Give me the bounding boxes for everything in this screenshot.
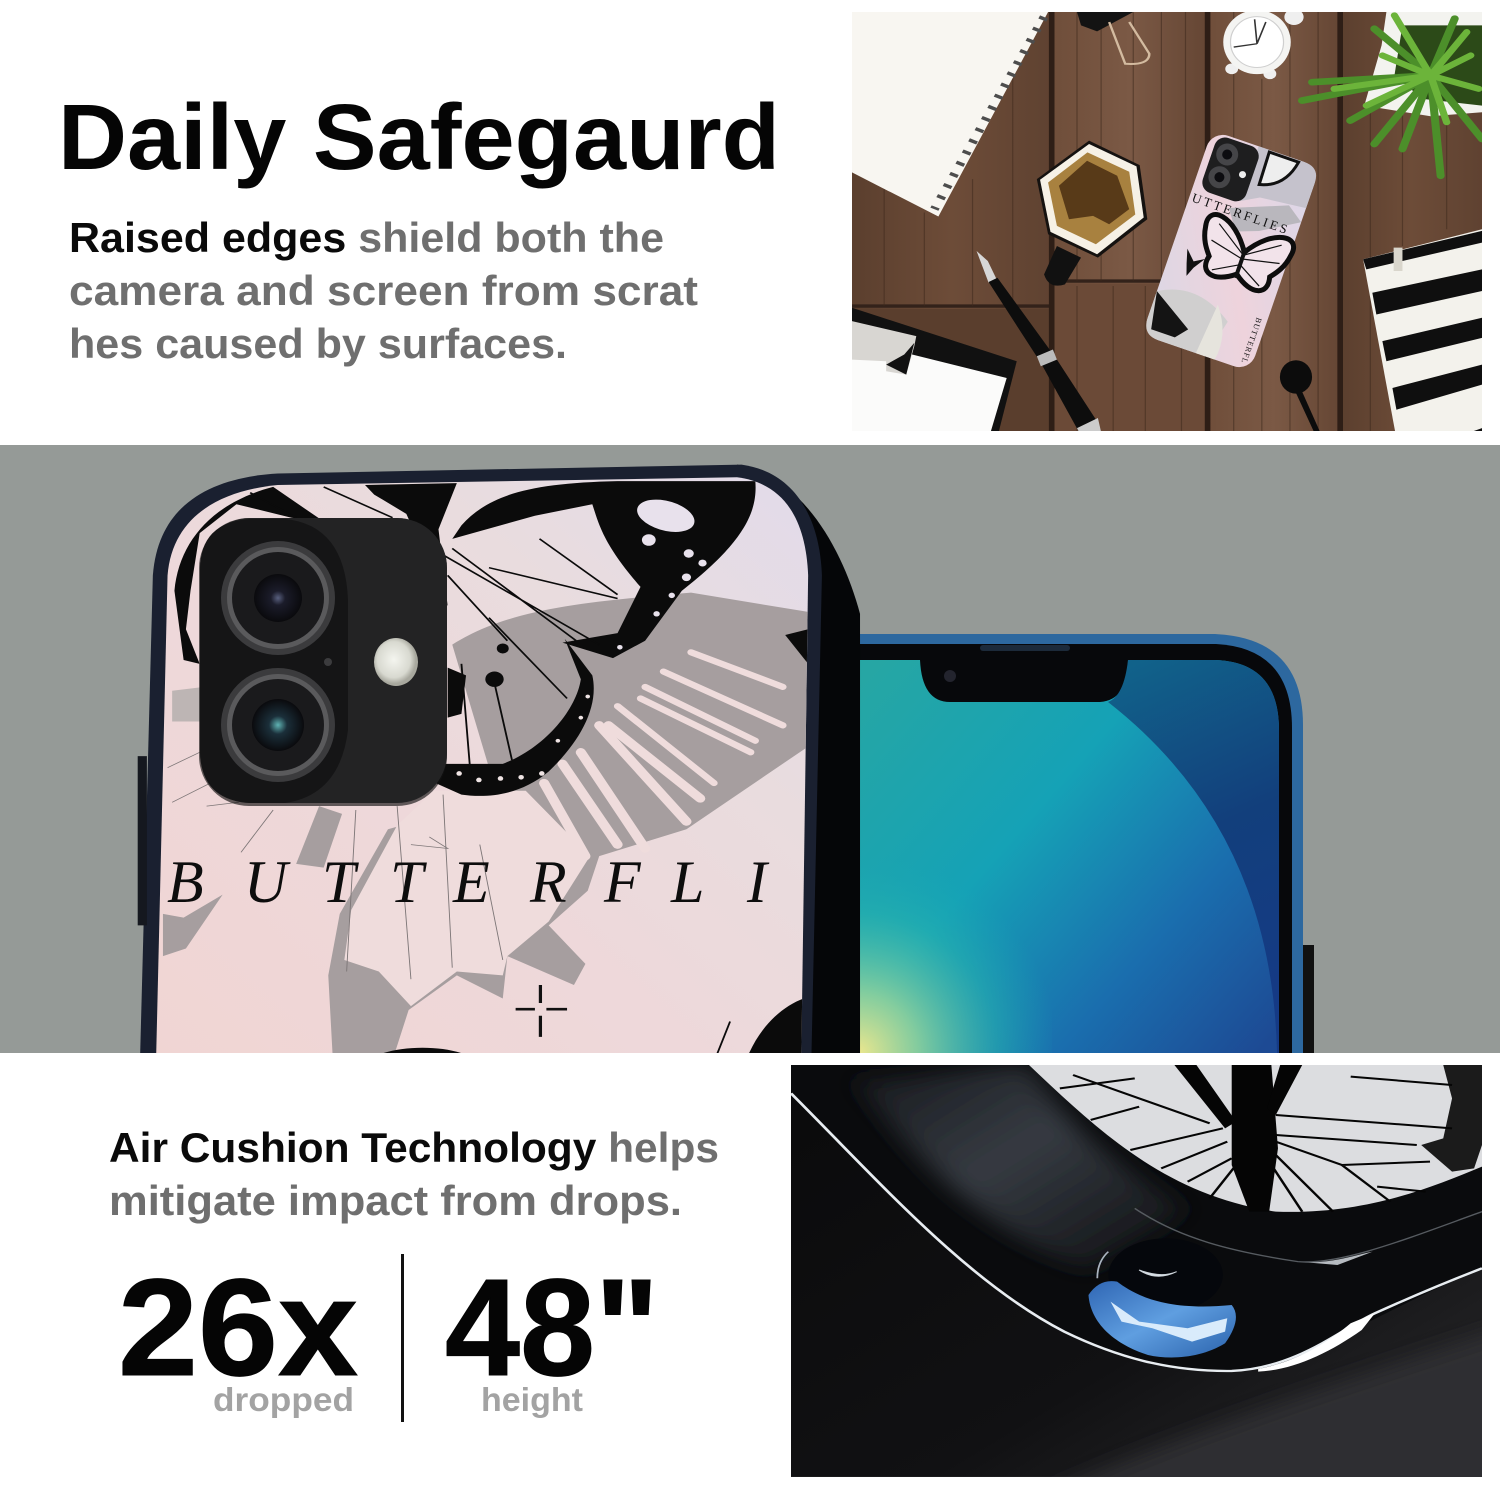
small phone case: BUTTERFL bbox=[1239, 316, 1264, 365]
case window bbox=[1029, 1065, 1482, 1212]
coffee cup bbox=[1037, 141, 1147, 286]
bezel glow bbox=[853, 1065, 1188, 1272]
alarm clock bbox=[1223, 9, 1304, 79]
stat: 26x dropped: 26x bbox=[118, 1251, 358, 1405]
stat: 26x dropped: dropped bbox=[213, 1381, 354, 1418]
butterfly body and veins bbox=[1060, 1065, 1482, 1212]
text block: raised edges: camera and screen from scrat bbox=[69, 267, 698, 314]
text block: air cushion: Air Cushion Technology helps bbox=[109, 1124, 719, 1171]
dark droplet dome bbox=[1110, 1238, 1160, 1268]
phone front with blue screen bbox=[840, 634, 1314, 1060]
text block: raised edges bbox=[69, 214, 698, 367]
camera module bbox=[199, 518, 447, 806]
gray butterfly shadow bbox=[328, 593, 808, 1060]
gray band: phone front and back bbox=[0, 445, 1500, 1060]
earpiece bbox=[1280, 360, 1320, 432]
small phone case bbox=[1142, 130, 1322, 372]
black left wing edge bbox=[174, 487, 324, 664]
photo: phone case on wooden desk bbox=[852, 9, 1482, 432]
stat: 48 inches height: height bbox=[481, 1381, 583, 1418]
potted plant bbox=[1302, 12, 1482, 176]
text block: air cushion bbox=[109, 1124, 719, 1224]
binder clip bbox=[1077, 12, 1149, 64]
text block: raised edges: hes caused by surfaces. bbox=[69, 320, 567, 367]
case lettering: BUTTERFLI bbox=[167, 849, 770, 915]
phone back with butterfly case bbox=[138, 465, 860, 1060]
black upper wing bbox=[452, 481, 756, 658]
pale lower wing bbox=[344, 791, 590, 1006]
text block: raised edges: Raised edges shield both the bbox=[69, 214, 664, 261]
spiral notebook bbox=[852, 12, 1048, 217]
title: Daily Safegaurd bbox=[58, 85, 780, 189]
text block: air cushion: mitigate impact from drops. bbox=[109, 1177, 682, 1224]
water drop bbox=[1088, 1252, 1236, 1358]
photo: water drop on case edge bbox=[791, 1065, 1500, 1498]
white edge highlight bbox=[791, 1093, 1482, 1371]
inner bezel reflections bbox=[1135, 1208, 1482, 1262]
stat: 48 inches height: 48" bbox=[445, 1251, 659, 1405]
divider between stats bbox=[401, 1254, 404, 1422]
sparkle mark bbox=[516, 985, 567, 1037]
small butterfly at bottom bbox=[384, 999, 802, 1053]
black lower wing rim bbox=[427, 639, 594, 796]
striped notebook bbox=[1363, 229, 1482, 432]
small phone case: UTTERFLIES bbox=[1190, 190, 1292, 237]
clipboard bbox=[852, 308, 1017, 432]
soft highlight on floor bbox=[1076, 1336, 1482, 1477]
bezel body bbox=[1146, 1167, 1482, 1370]
pen bbox=[977, 251, 1101, 432]
